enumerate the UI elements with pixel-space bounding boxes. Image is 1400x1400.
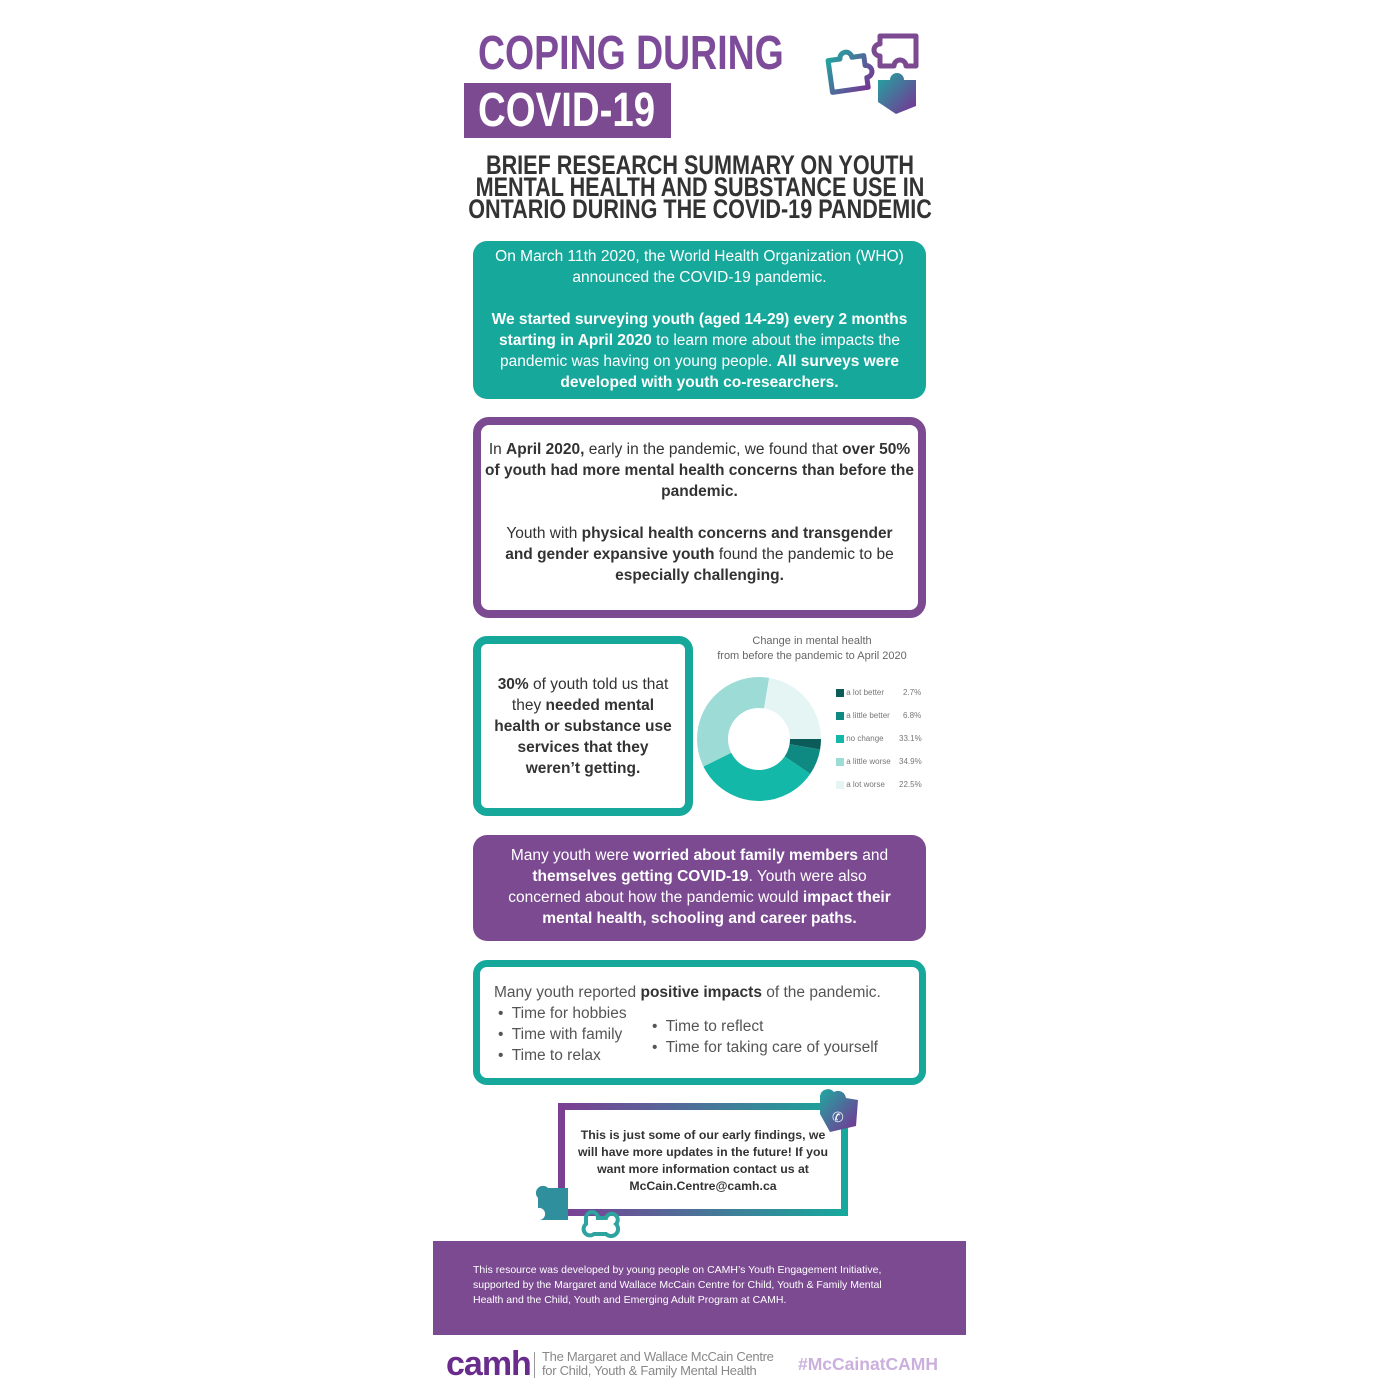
chart legend: no change [846,734,884,743]
title: covid-19 box: COVID-19 [478,84,655,137]
chart legend [836,688,922,789]
chart legend: a little worse [846,757,891,766]
footer band [433,1241,966,1335]
panel: April 2020 findings: Youth with physical health concerns and transgender and gender expansive youth found the pandemic to be especially challenging. [505,525,894,584]
chart title [717,635,907,662]
panel: positive impacts: • Time for taking care of yourself [652,1039,878,1056]
chart title: from before the pandemic to April 2020 [717,650,907,662]
panel: positive impacts [473,960,926,1085]
chart legend: 33.1% [899,734,922,743]
callout: contact box: This is just some of our early findings, we will have more updates in the future! If you want more information contact us at McCain.Centre@camh.ca [578,1128,828,1193]
panel: WHO announcement: We started surveying youth (aged 14-29) every 2 months starting in April 2020 to learn more about the impacts the pandemic was having on young people. All surveys were developed with youth co-researchers. [492,311,907,391]
panel: positive impacts: • Time to reflect [652,1018,763,1035]
subtitle: BRIEF RESEARCH SUMMARY ON YOUTH [486,150,914,180]
subtitle [468,150,932,224]
icon: phone puzzle [820,1089,858,1132]
callout: contact box [536,1089,858,1238]
panel: 30% unmet needs [473,636,693,816]
logo: camh: camh [446,1345,531,1383]
chart title: Change in mental health [752,635,872,647]
panel: April 2020 findings [473,417,926,618]
panel: 30% unmet needs: 30% of youth told us that they needed mental health or substance use services that they weren’t getting. [494,676,672,777]
donut chart [697,677,821,801]
chart legend: 34.9% [899,757,922,766]
hashtag: #McCainatCAMH [798,1354,938,1374]
subtitle: MENTAL HEALTH AND SUBSTANCE USE IN [476,172,924,202]
chart legend: 2.7% [903,688,921,697]
logo: camh: for Child, Youth & Family Mental Health [542,1363,756,1378]
panel: worries: Many youth were worried about family members and themselves getting COVID-19. Youth were also concerned about how the pandemic would impact their mental health, schooling and career paths. [508,847,891,927]
footer band: This resource was developed by young people on CAMH’s Youth Engagement Initiative, supported by the Margaret and Wallace McCain Centre for Child, Youth & Family Mental Health and the Child, Youth and Emerging Adult Program at CAMH. [473,1264,882,1306]
panel: positive impacts: • Time for hobbies [498,1005,627,1022]
title: coping during: COPING DURING [478,27,784,80]
icon: left puzzle pieces [536,1186,618,1236]
panel: positive impacts: • Time to relax [498,1047,601,1064]
subtitle: ONTARIO DURING THE COVID-19 PANDEMIC [468,194,932,224]
logo: camh [446,1345,774,1383]
chart legend: a little better [846,711,890,720]
panel: worries [473,835,926,941]
panel: positive impacts: Many youth reported positive impacts of the pandemic. [494,984,881,1001]
panel: WHO announcement: On March 11th 2020, the World Health Organization (WHO) announced the COVID-19 pandemic. [495,248,904,286]
chart legend: 22.5% [899,780,922,789]
icon: puzzle pieces [826,34,918,114]
chart legend: a lot worse [846,780,885,789]
icon: phone puzzle: ✆ [832,1109,844,1125]
chart legend: a lot better [846,688,884,697]
panel: positive impacts: • Time with family [498,1026,622,1043]
panel: WHO announcement [473,241,926,399]
logo: camh: The Margaret and Wallace McCain Centre [542,1349,774,1364]
chart legend: 6.8% [903,711,921,720]
panel: April 2020 findings: In April 2020, early in the pandemic, we found that over 50% of youth had more mental health concerns than before the pandemic. [485,441,914,500]
